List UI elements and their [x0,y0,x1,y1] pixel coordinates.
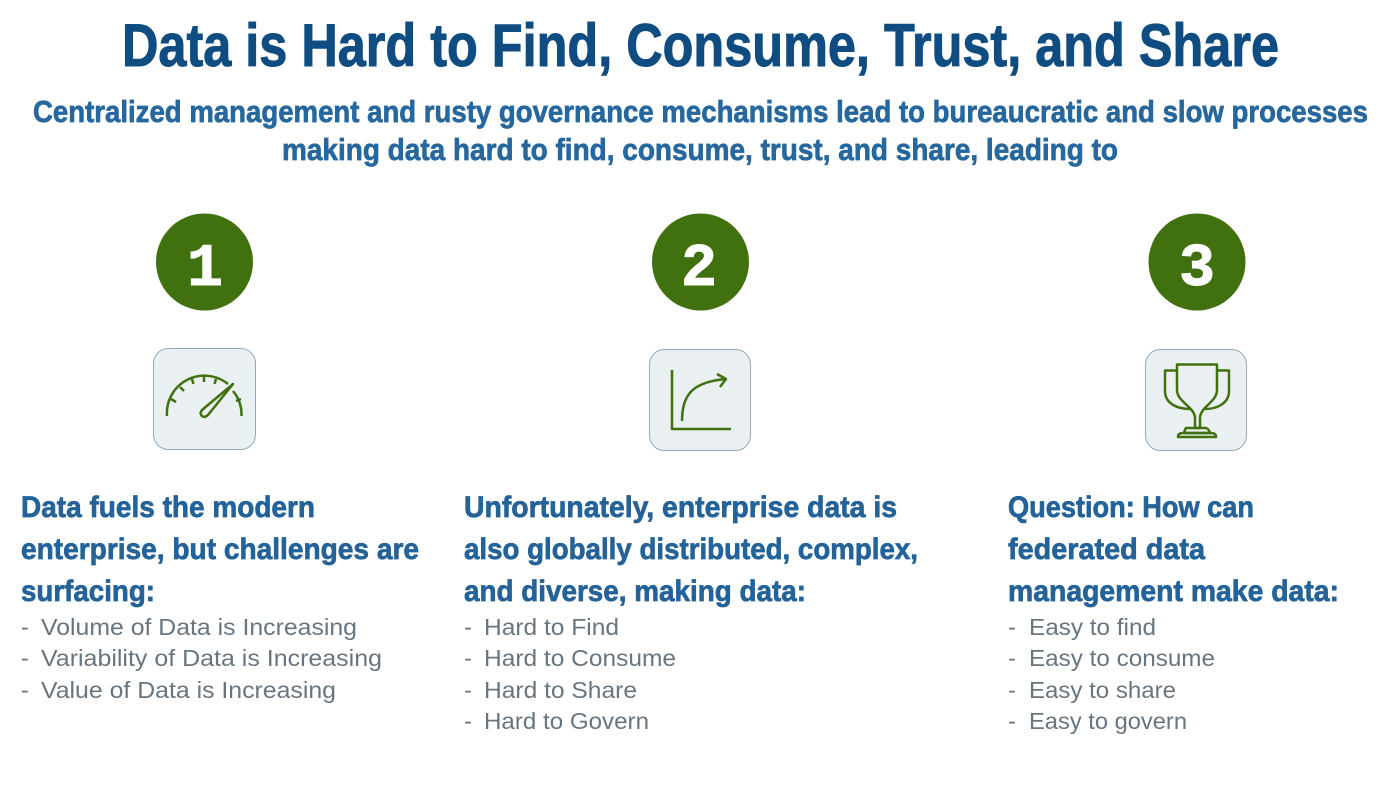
column 3 list [1008,614,1215,734]
column 3 list: Easy to consume [1029,645,1215,671]
column 2 list: Hard to Consume [484,645,676,671]
column 1 list [21,614,382,703]
icon: speedometer gauge [154,348,256,450]
number badge 1: 1 [187,236,223,304]
column 1 list: - [21,614,29,640]
column 2 list: - [464,614,472,640]
column 2 list [464,614,676,734]
column 2 list: - [464,645,472,671]
number badge 2: 2 [681,236,717,304]
column 2 heading: also globally distributed, complex, [464,533,918,566]
column 3 list: Easy to share [1029,677,1176,703]
column 1 list: Variability of Data is Increasing [41,645,382,671]
column 2 list: Hard to Govern [484,708,649,734]
column 3 heading: management make data: [1008,575,1339,608]
column 2 heading: Unfortunately, enterprise data is [464,491,897,524]
column 3 list: - [1008,645,1016,671]
column 1 heading: surfacing: [21,575,155,608]
subtitle [33,94,1368,167]
column 1 text [21,491,419,703]
column 3 list: Easy to govern [1029,708,1187,734]
column 3 text [1008,491,1339,734]
number badge 3 [1148,214,1246,310]
column 2 text [464,491,918,734]
column 2 heading: and diverse, making data: [464,575,806,608]
column 1 list: - [21,677,29,703]
column 3 list: - [1008,708,1016,734]
column 2 list: - [464,708,472,734]
column 3 heading: Question: How can [1008,491,1254,524]
column 2 list: - [464,677,472,703]
column 3 list: - [1008,614,1016,640]
number badge 3: 3 [1179,236,1215,304]
number badge 2 [652,214,749,310]
column 2 heading [464,491,918,608]
column 3 list: - [1008,677,1016,703]
column 1 list: - [21,645,29,671]
number badge 1 [156,214,253,310]
column 1 heading: Data fuels the modern [21,491,315,524]
subtitle: making data hard to find, consume, trust, and share, leading to [282,132,1118,167]
column 2 list: Hard to Share [484,677,637,703]
column 3 heading: federated data [1008,533,1206,566]
column 1 list: Value of Data is Increasing [41,677,336,703]
icon: trophy [1146,350,1246,450]
column 1 heading [21,491,419,608]
column 3 heading [1008,491,1339,608]
column 1 heading: enterprise, but challenges are [21,533,419,566]
column 1 list: Volume of Data is Increasing [41,614,357,640]
column 3 list: Easy to find [1029,614,1156,640]
column 2 list: Hard to Find [484,614,619,640]
icon: growth chart with arrow [650,350,750,450]
